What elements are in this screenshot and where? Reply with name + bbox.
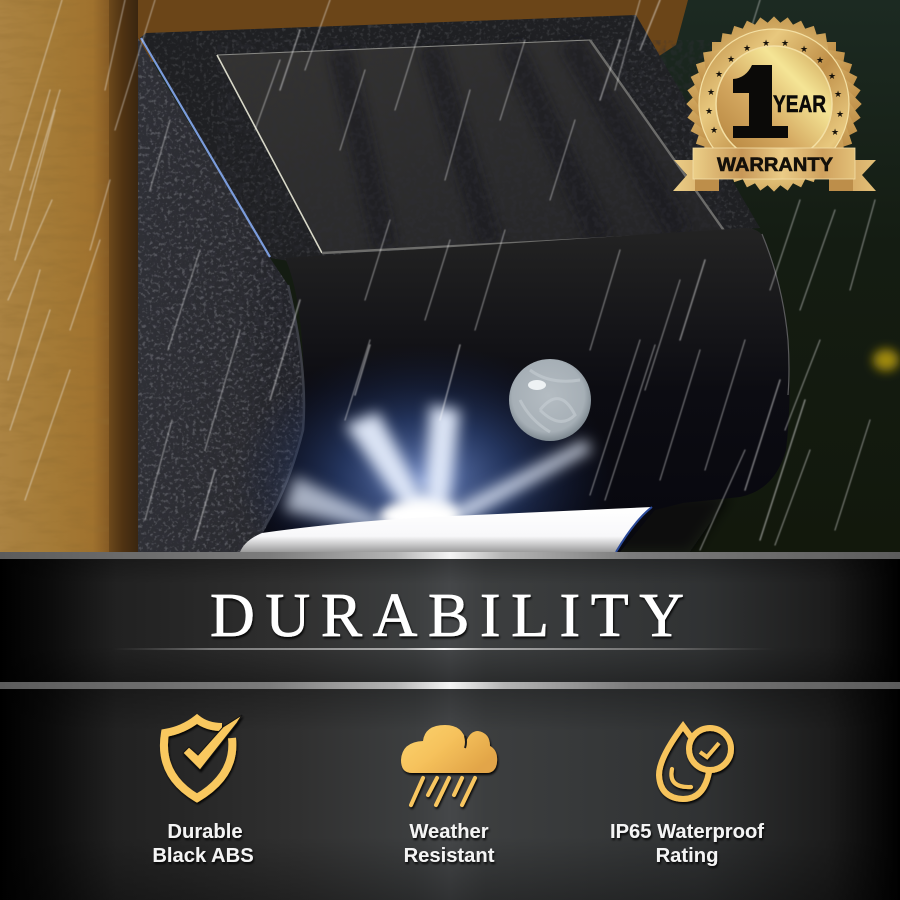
- WARRANTY: WARRANTY: [717, 155, 833, 176]
- seal inner rings: [699, 29, 849, 179]
- ribbon folds: [695, 178, 853, 191]
- feature: durable black ABS: [152, 715, 254, 867]
- shadow beneath housing: [626, 499, 726, 552]
- stars ring: ★: [705, 107, 713, 117]
- label: IP65 Waterproof: [610, 821, 764, 843]
- stars ring: ★: [762, 39, 770, 49]
- feature: IP65 waterproof rating: [610, 726, 764, 867]
- icon: water drop with check: [659, 726, 731, 799]
- label: Durable: [167, 821, 243, 843]
- stars ring: ★: [800, 45, 808, 55]
- device top face: [140, 15, 760, 262]
- rain streaks: [8, 0, 875, 550]
- warranty badge: [673, 16, 876, 192]
- label: Resistant: [404, 845, 495, 867]
- stars ring: ★: [743, 44, 751, 54]
- stars ring: ★: [715, 70, 723, 80]
- middle metallic band: [0, 682, 900, 689]
- title underline: [112, 648, 776, 650]
- icon: shield with check: [164, 715, 242, 798]
- solar panel: [217, 40, 725, 253]
- background foliage: [108, 0, 900, 552]
- stars ring: ★: [834, 90, 842, 100]
- title panel background: [0, 559, 900, 683]
- seal serrated edge: [686, 16, 862, 192]
- device side panel: [138, 38, 308, 552]
- stars ring: ★: [816, 56, 824, 66]
- stars ring: ★: [781, 39, 789, 49]
- light core: [380, 500, 460, 532]
- housing rim highlight: [762, 234, 789, 395]
- ribbon band: [693, 148, 855, 179]
- stars ring: ★: [710, 126, 718, 136]
- top metallic band: [0, 552, 900, 559]
- stars ring: ★: [727, 55, 735, 65]
- label: Black ABS: [152, 845, 254, 867]
- stars ring: ★: [828, 72, 836, 82]
- seal center disc: [716, 46, 832, 162]
- illuminated lens: [240, 507, 652, 552]
- feature panel background: [0, 689, 900, 900]
- device front housing: [250, 228, 790, 552]
- light glow: [264, 360, 595, 532]
- PIR motion sensor: [509, 359, 591, 441]
- light rays: [284, 405, 592, 535]
- label: Weather: [409, 821, 489, 843]
- yellow flower blur: [873, 349, 899, 371]
- label: Rating: [656, 845, 718, 867]
- ribbon tails: [673, 160, 876, 191]
- lens right edge: [616, 507, 652, 552]
- stars ring: ★: [836, 110, 844, 120]
- feature: weather resistant: [401, 725, 497, 867]
- icon: rain cloud: [401, 725, 497, 805]
- number 1: [733, 65, 788, 138]
- YEAR: YEAR: [773, 91, 826, 118]
- title: DURABILITY: [210, 582, 684, 650]
- stars ring: ★: [831, 128, 839, 138]
- wooden post: [0, 0, 688, 552]
- stars ring: ★: [707, 88, 715, 98]
- photo: wet solar light on wooden post: [0, 0, 900, 552]
- stars ring: [705, 39, 844, 138]
